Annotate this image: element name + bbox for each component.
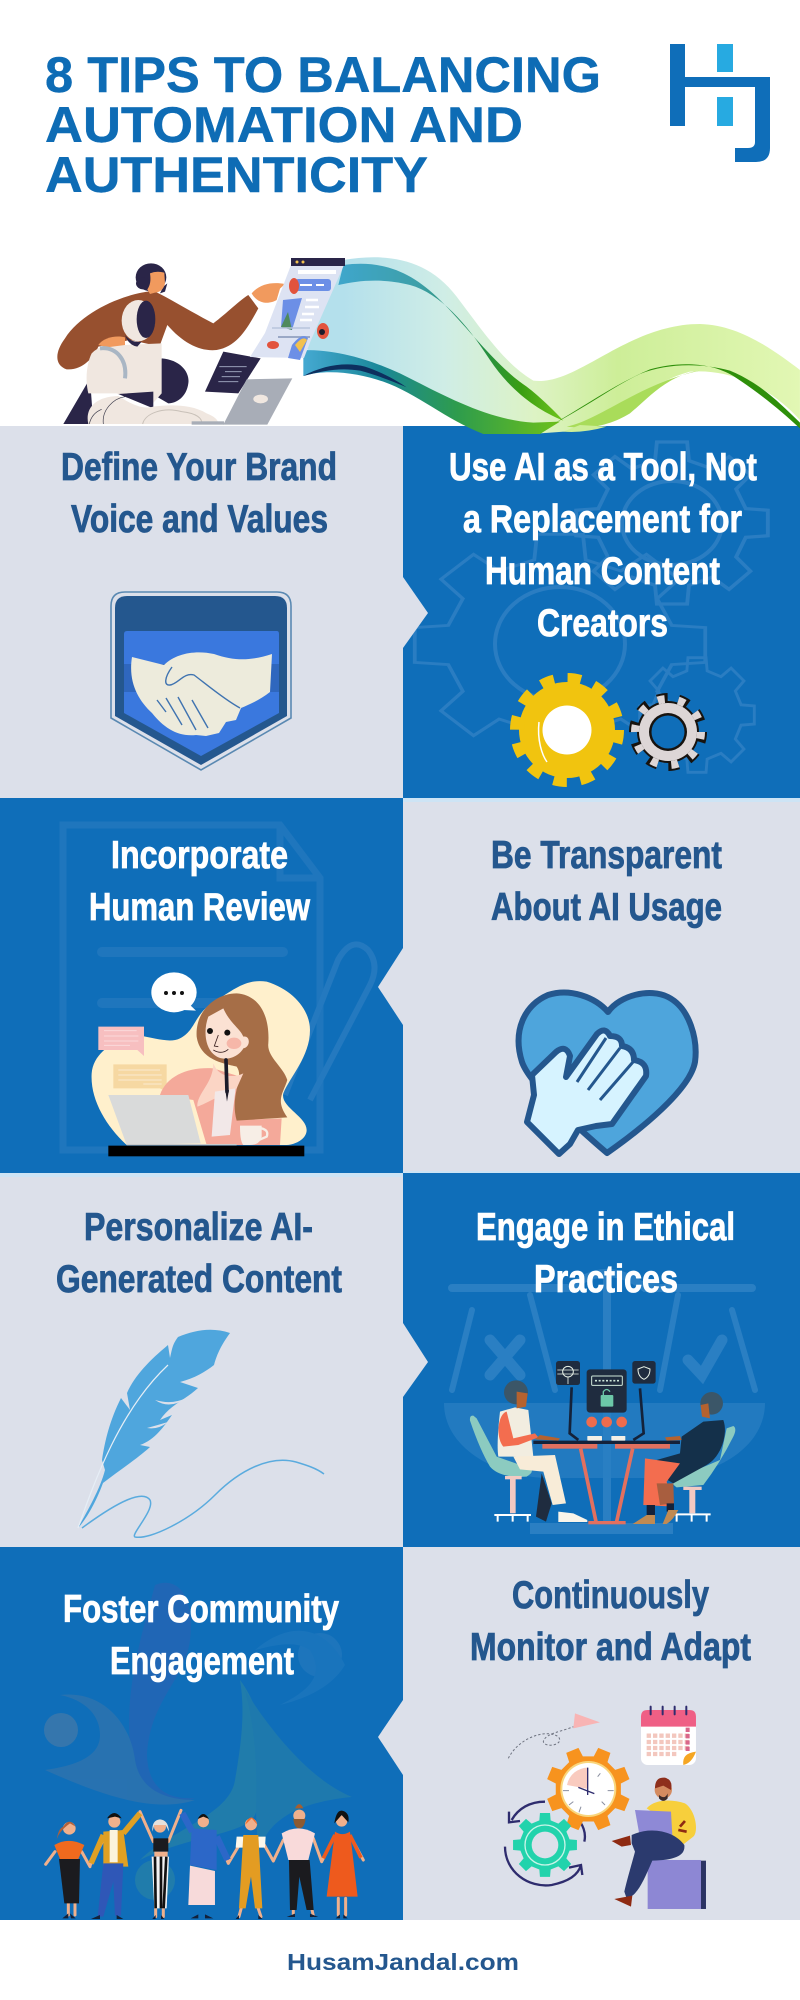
panel: engage in ethical practices [403, 1173, 800, 1547]
heading [63, 1588, 339, 1683]
footer: website: HusamJandal.com [287, 1949, 519, 1975]
heading: Voice and Values [71, 498, 328, 541]
heading [470, 1574, 751, 1669]
heading [491, 834, 722, 929]
heading: a Replacement for [463, 498, 742, 541]
heading: Human Content [485, 550, 720, 593]
notch arrow [378, 1700, 403, 1775]
heading: Generated Content [56, 1258, 342, 1301]
heading: Engagement [110, 1640, 294, 1683]
background community watermark [44, 1583, 352, 1900]
title [45, 46, 601, 203]
illustration: two people at a security desk [470, 1361, 735, 1524]
background scales watermark [444, 1273, 765, 1534]
heading: Incorporate [111, 834, 288, 877]
heading [89, 834, 311, 929]
panel: incorporate human review [0, 798, 403, 1173]
background document and pen watermark [63, 825, 375, 1150]
heading [56, 1206, 342, 1301]
title: AUTOMATION AND [45, 96, 523, 153]
panel: use AI as a tool [403, 426, 800, 798]
heading: Define Your Brand [61, 446, 337, 489]
notch arrow [403, 1323, 428, 1397]
heading: About AI Usage [491, 886, 722, 929]
panel: personalize AI-generated content [0, 1173, 403, 1547]
panel: define your brand voice and values [0, 426, 403, 798]
heading [61, 446, 337, 541]
title: AUTHENTICITY [45, 146, 428, 203]
heading: Continuously [512, 1574, 709, 1617]
heading: Creators [537, 602, 668, 645]
heading: Engage in Ethical [476, 1206, 735, 1249]
icon: yellow and grey gears [517, 680, 701, 780]
heading: Foster Community [63, 1588, 339, 1631]
panel: be transparent about AI usage [403, 798, 800, 1173]
panel: foster community engagement [0, 1547, 403, 1920]
illustration: floating web page [250, 258, 345, 360]
illustration: gears, clock, calendar and man with laptop [505, 1707, 706, 1909]
heading: Human Review [89, 886, 311, 929]
notch arrow [378, 948, 403, 1025]
decorative wave ribbon [303, 257, 800, 434]
illustration: woman and robot with web page [57, 263, 292, 425]
notch arrow [403, 577, 428, 648]
panel: continuously monitor and adapt [403, 1547, 800, 1920]
icon: hand on heart [519, 993, 696, 1154]
heading [449, 446, 757, 645]
background gears watermark [415, 442, 768, 772]
icon: handshake shield badge [111, 592, 291, 770]
heading: Personalize AI- [84, 1206, 313, 1249]
illustration: group holding hands [46, 1804, 363, 1919]
heading [476, 1206, 735, 1301]
icon: feather quill [78, 1330, 324, 1537]
heading: Practices [534, 1258, 678, 1301]
title: 8 TIPS TO BALANCING [45, 46, 601, 103]
heading: Be Transparent [491, 834, 722, 877]
illustration: woman at laptop [92, 972, 310, 1156]
logo: HJ monogram [670, 44, 770, 162]
